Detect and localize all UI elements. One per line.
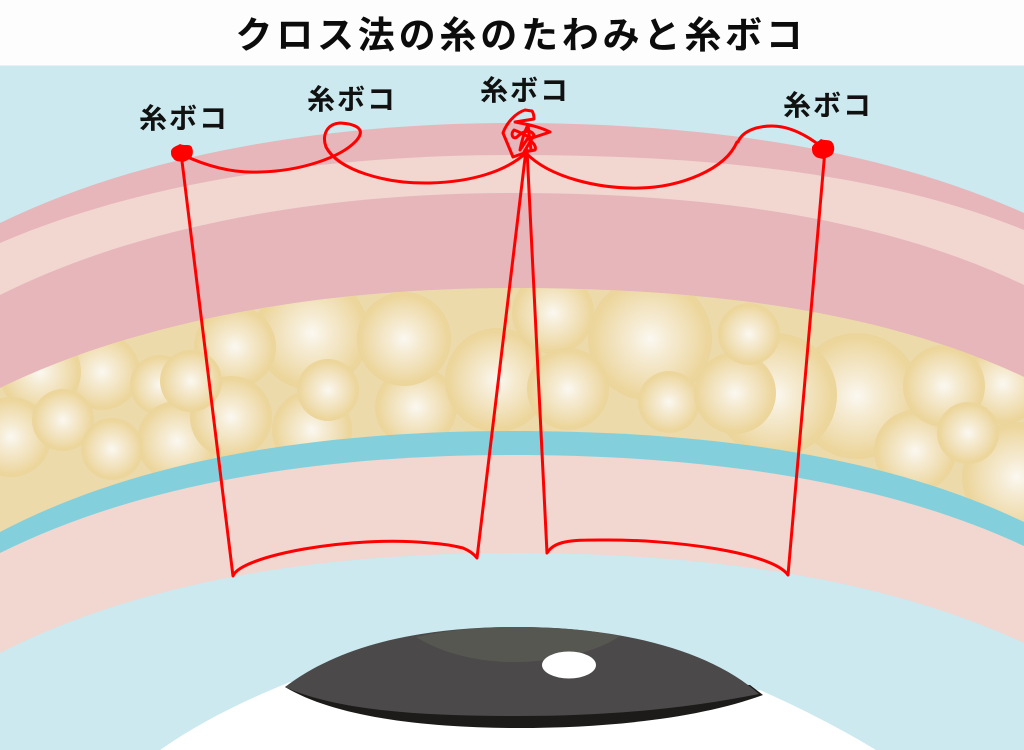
- pupil reflection area: [416, 627, 620, 662]
- iris and lid shadow: [285, 627, 763, 728]
- tarsal layer: pale pink band: [0, 455, 1024, 750]
- thread end: left knot: [171, 144, 193, 162]
- fat layer: [0, 288, 1024, 750]
- iris: [285, 627, 759, 716]
- iris dark lower rim: [285, 680, 763, 728]
- muscle layer: dark pink band: [0, 193, 1024, 750]
- label: second 糸ボコ: 糸ボコ: [307, 84, 397, 115]
- label: center 糸ボコ: 糸ボコ: [480, 75, 570, 106]
- right surface thread with slack: [526, 142, 737, 188]
- thread end: right knot: [812, 139, 834, 159]
- central knot scribble: [503, 110, 550, 157]
- skin layer: pale band: [0, 155, 1024, 750]
- left thread loop down to the lid: [181, 150, 526, 576]
- conjunctiva: pale blue area: [0, 553, 1024, 750]
- right thread loop down to the lid: [527, 150, 825, 575]
- title: クロス法の糸のたわみと糸ボコ: [235, 15, 807, 56]
- suture thread: [181, 110, 825, 576]
- label: left 糸ボコ: 糸ボコ: [139, 103, 229, 134]
- fat globules: [0, 288, 1024, 514]
- fascia: blue band: [0, 431, 1024, 750]
- label: right 糸ボコ: 糸ボコ: [783, 90, 873, 121]
- eye white: [160, 682, 876, 750]
- right slack arc: [738, 126, 823, 148]
- left surface thread with slack loop: [183, 123, 526, 183]
- header bar: [0, 0, 1024, 66]
- catchlight: [542, 652, 596, 678]
